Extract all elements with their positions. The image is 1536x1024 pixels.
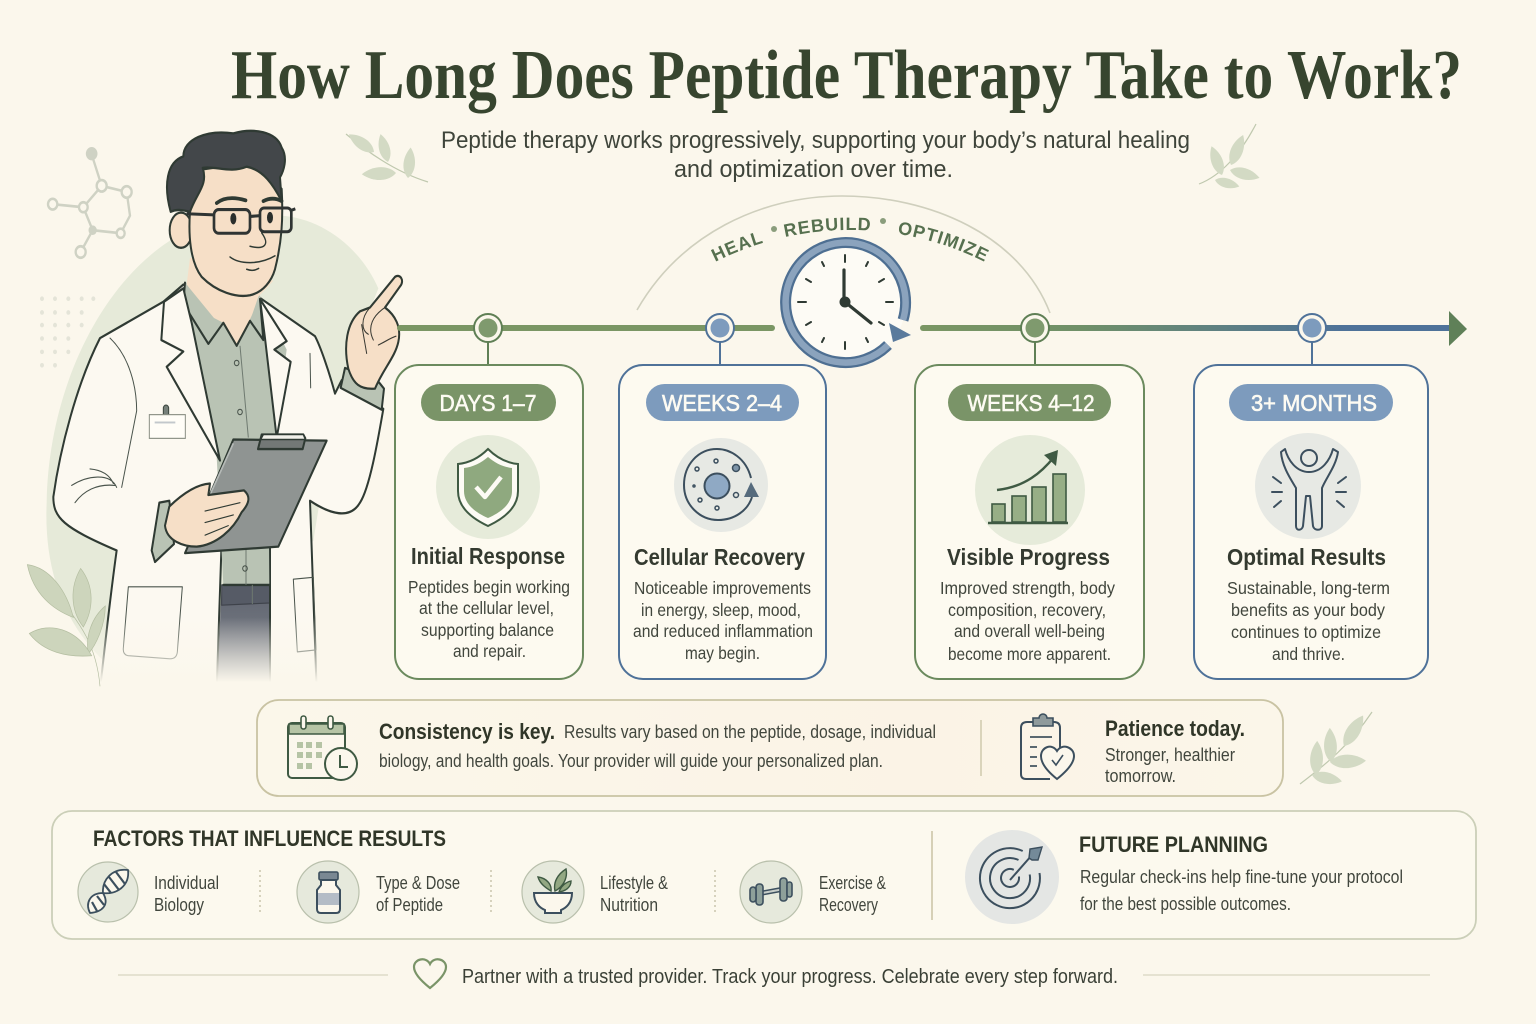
panel: factors and future planning: FUTURE PLANNING — [1079, 832, 1268, 857]
eyebrows — [217, 198, 282, 203]
panel: factors and future planning: Regular check-ins help fine-tune your protocol — [1080, 867, 1403, 887]
holding hand — [165, 484, 248, 547]
card 3: weeks 4-12 — [915, 365, 1144, 679]
glasses — [187, 208, 295, 233]
clipboard — [185, 435, 327, 553]
pill: WEEKS 4–12 — [968, 390, 1094, 416]
nose and mouth — [230, 233, 275, 270]
green background blob — [46, 215, 378, 675]
panel: factors and future planning: Exercise & — [819, 873, 886, 893]
icon: calendar with clock — [288, 716, 357, 780]
pill — [948, 384, 1111, 421]
collar — [183, 283, 263, 346]
node 3 — [1021, 314, 1049, 342]
dot pattern — [40, 296, 95, 368]
subtitle: Peptide therapy works progressively, supporting your body’s natural healing — [441, 127, 1190, 154]
card 4: 3+ months: benefits as your body — [1231, 600, 1385, 620]
card 4: 3+ months — [1194, 365, 1428, 679]
pill — [1229, 384, 1393, 421]
factor: individual biology: Biology — [154, 895, 204, 915]
factor: lifestyle and nutrition — [522, 861, 584, 923]
pill — [421, 384, 556, 421]
leaves: bottom left — [27, 565, 105, 686]
icon: cell — [674, 438, 768, 532]
pointing hand — [346, 276, 402, 389]
card 1: days 1-7: and repair. — [453, 641, 526, 661]
arc separators — [771, 218, 886, 232]
card 4: 3+ months: Optimal Results — [1227, 544, 1386, 570]
pants — [217, 585, 271, 698]
doctor illustration — [20, 131, 402, 714]
icon: clipboard with heart — [1021, 714, 1074, 779]
icon: target — [965, 830, 1059, 924]
panel: factors and future planning — [52, 811, 1476, 939]
card 2: weeks 2-4: and reduced inflammation — [633, 621, 813, 641]
card 3: weeks 4-12: composition, recovery, — [948, 600, 1106, 620]
panel: consistency and patience: Patience today. — [1105, 716, 1245, 741]
subtitle — [441, 127, 1190, 183]
node 2 — [706, 314, 734, 342]
node 4 — [1298, 314, 1326, 342]
card 4: 3+ months: Sustainable, long-term — [1227, 578, 1390, 598]
card 2: weeks 2-4: Noticeable improvements — [634, 578, 811, 598]
eyes — [230, 213, 236, 224]
panel: consistency and patience: Results vary based on the peptide, dosage, individual — [564, 722, 936, 742]
card 1: days 1-7 — [395, 365, 583, 679]
card 3: weeks 4-12: become more apparent. — [948, 644, 1111, 664]
icon: growth chart — [975, 435, 1085, 545]
pill — [646, 384, 799, 421]
factor: individual biology — [78, 862, 219, 922]
arc label: heal rebuild optimize: HEAL REBUILD OPTIMIZE — [711, 218, 989, 262]
arrowhead — [1449, 311, 1467, 346]
panel: consistency and patience — [257, 700, 1283, 796]
pill: 3+ MONTHS — [1251, 390, 1377, 416]
decorative leaf sprig: top right — [1199, 124, 1261, 191]
node 1 — [474, 314, 502, 342]
pill: WEEKS 2–4 — [662, 390, 782, 416]
card 2: weeks 2-4: in energy, sleep, mood, — [641, 600, 801, 620]
factor: type and dose — [297, 861, 359, 923]
factor: individual biology: Individual — [154, 873, 219, 893]
footer — [118, 959, 1430, 988]
card 1: days 1-7: Peptides begin working — [408, 577, 570, 597]
panel: consistency and patience: biology, and health goals. Your provider will guide your personalized plan. — [379, 751, 883, 771]
molecule — [48, 148, 132, 258]
card 1: days 1-7: supporting balance — [421, 620, 554, 640]
card 3: weeks 4-12: and overall well-being — [954, 621, 1105, 641]
card 4: 3+ months: and thrive. — [1272, 644, 1345, 664]
right cuff — [341, 368, 384, 410]
card 2: weeks 2-4: Cellular Recovery — [634, 544, 805, 570]
panel: consistency and patience: Stronger, healthier — [1105, 745, 1235, 765]
neck — [187, 258, 273, 346]
shirt — [185, 283, 287, 585]
head — [189, 162, 282, 296]
clock — [784, 241, 911, 363]
lapels — [161, 288, 220, 461]
card 4: 3+ months: continues to optimize — [1231, 622, 1381, 642]
panel: consistency and patience: Consistency is key. — [379, 719, 555, 744]
name badge — [149, 405, 185, 438]
panel: factors and future planning: Type & Dose — [376, 873, 460, 893]
card 1: days 1-7: at the cellular level, — [419, 598, 554, 618]
panel: factors and future planning: of Peptide — [376, 895, 443, 915]
panel: factors and future planning: Recovery — [819, 895, 878, 915]
ear — [170, 213, 192, 248]
panel: factors and future planning: FACTORS THAT INFLUENCE RESULTS — [93, 826, 446, 851]
panel: consistency and patience: tomorrow. — [1105, 766, 1176, 786]
coat details — [72, 338, 311, 503]
bottom fade — [20, 617, 353, 682]
timeline — [400, 311, 1467, 365]
factor: exercise and recovery — [740, 861, 802, 923]
decorative leaf sprig: right of panel — [1300, 712, 1372, 787]
icon: thriving figure — [1255, 433, 1361, 539]
hair — [167, 131, 285, 212]
arc over the clock — [637, 196, 1050, 313]
lab coat — [53, 285, 383, 690]
panel: factors and future planning: Lifestyle & — [600, 873, 668, 893]
card 1: days 1-7: Initial Response — [411, 543, 565, 569]
pockets — [123, 587, 182, 659]
icon: heart — [414, 959, 446, 988]
footer: Partner with a trusted provider. Track your progress. Celebrate every step forward. — [462, 965, 1118, 988]
pill: DAYS 1–7 — [440, 390, 536, 416]
card 2: weeks 2-4: may begin. — [685, 643, 760, 663]
decorative leaf sprig: top left — [346, 130, 428, 182]
stems — [488, 342, 1035, 365]
card 3: weeks 4-12: Visible Progress — [947, 544, 1110, 570]
panel: factors and future planning: for the best possible outcomes. — [1080, 894, 1291, 914]
panel: factors and future planning: Nutrition — [600, 895, 658, 915]
card 3: weeks 4-12: Improved strength, body — [940, 578, 1115, 598]
left cuff — [152, 501, 174, 562]
subtitle: and optimization over time. — [674, 156, 953, 183]
icon: shield — [436, 435, 540, 539]
card 2: weeks 2-4 — [619, 365, 826, 679]
